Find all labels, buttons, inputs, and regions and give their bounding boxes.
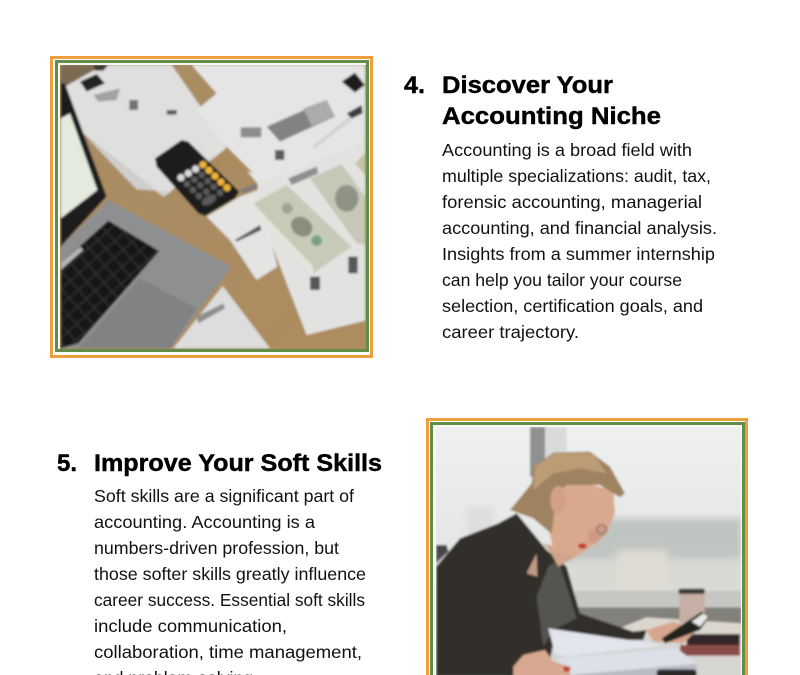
photo frame: desk with calculator (52, 58, 372, 356)
body text: section 5: accounting. Accounting is a (94, 512, 315, 532)
section 5: soft skills (57, 420, 746, 675)
body text: section 5: those softer skills greatly influence (94, 564, 366, 584)
body text: section 5: career success. Essential soft skills (94, 590, 365, 610)
step number 4: 4. (404, 72, 425, 99)
laptop (61, 83, 232, 348)
body text: section 4: career trajectory. (442, 322, 579, 342)
hand and calculator (647, 612, 709, 643)
chair (436, 545, 448, 563)
dollar bills (253, 153, 365, 274)
documents (548, 628, 663, 657)
coffee cup (679, 589, 705, 623)
body text: section 4 (442, 140, 717, 342)
hand (513, 650, 570, 675)
body text: section 4: can help you tailor your course (442, 270, 682, 290)
body text: section 5 (94, 486, 366, 675)
body text: section 4: Insights from a summer internship (442, 244, 715, 264)
body text: section 4: selection, certification goals, and (442, 296, 703, 316)
hair and face (548, 480, 615, 557)
heading: Discover Your Accounting Niche: Discover Your (442, 72, 613, 99)
step number 5: 5. (57, 450, 77, 477)
body text: section 5: Soft skills are a significant part of (94, 486, 354, 506)
body text: section 4: accounting, and financial analysis. (442, 218, 717, 238)
section 4: accounting niche (52, 58, 717, 356)
body text: section 4: Accounting is a broad field with (442, 140, 692, 160)
window frame (530, 427, 545, 477)
desk items (687, 634, 740, 646)
photo: woman reviewing documents (435, 425, 742, 675)
calculator phone (155, 140, 239, 216)
body text: section 5: include communication, (94, 616, 287, 636)
body text: section 4: forensic accounting, managerial (442, 192, 702, 212)
body text: section 5: numbers-driven profession, but (94, 538, 339, 558)
body text: section 4: multiple specializations: audit, tax, (442, 166, 711, 186)
shirt (436, 513, 647, 675)
heading: Discover Your Accounting Niche: Accounting Niche (442, 103, 661, 130)
heading: Improve Your Soft Skills: Improve Your Soft Skills (94, 450, 382, 477)
photo frame: woman with calculator (428, 420, 746, 675)
neck (543, 543, 577, 567)
body text: section 5: collaboration, time management, (94, 642, 362, 662)
heading: Discover Your Accounting Niche (442, 72, 661, 130)
photo: desk, laptop, calculator and money (57, 62, 370, 352)
